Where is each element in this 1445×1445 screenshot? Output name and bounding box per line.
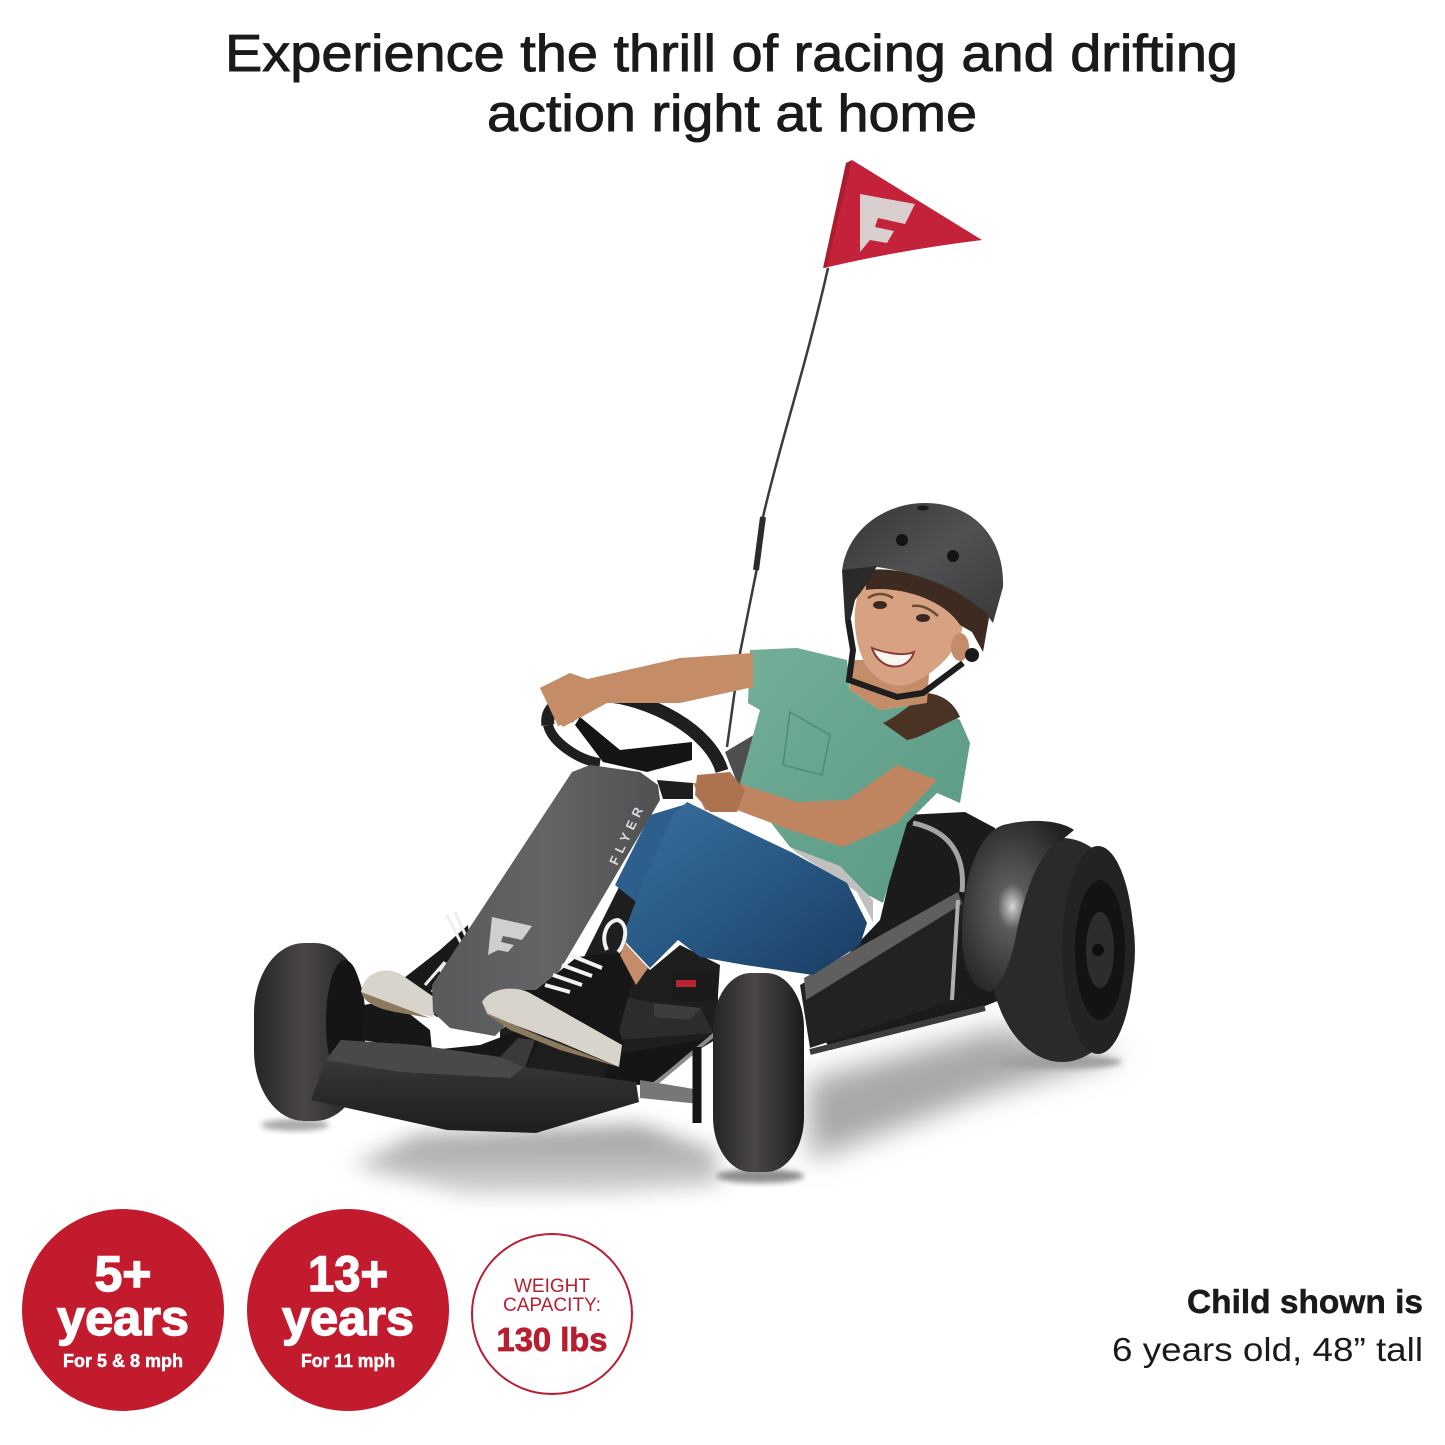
back sneaker <box>361 912 470 1018</box>
helmet <box>842 503 1003 697</box>
ponytail <box>883 693 960 740</box>
badge: 5+ years <box>22 1209 224 1411</box>
rear wheel and fender <box>962 821 1135 1062</box>
left front wheel <box>254 943 365 1121</box>
left arm <box>540 653 753 727</box>
hands <box>540 673 590 726</box>
badge: weight capacity <box>472 1234 632 1394</box>
note: child shown <box>1112 1283 1423 1368</box>
ground shadow <box>261 1028 1125 1196</box>
face <box>855 569 990 686</box>
badge: weight capacity: 130 lbs <box>496 1321 608 1358</box>
note: child shown: 6 years old, 48” tall <box>1112 1331 1423 1368</box>
neck <box>850 660 930 710</box>
title: action right at home <box>487 85 977 143</box>
dark area behind legs <box>500 875 720 1085</box>
badge: 13+ years: 13+ <box>308 1246 388 1302</box>
badge: 5+ years: For 5 & 8 mph <box>63 1351 183 1371</box>
badge: weight capacity: CAPACITY: <box>503 1295 601 1316</box>
front sneaker <box>482 920 648 1067</box>
front jeans leg <box>622 802 867 975</box>
badge: 5+ years: years <box>57 1290 189 1346</box>
badge: 5+ years: 5+ <box>94 1246 152 1302</box>
icon: red pennant flag with pole <box>727 160 982 747</box>
steering column <box>432 765 660 1036</box>
badge: 13+ years: For 11 mph <box>301 1351 395 1371</box>
rear chassis body <box>800 812 1000 1052</box>
pedals <box>362 1000 540 1070</box>
right front wheel <box>713 973 804 1172</box>
floorboard <box>600 972 718 1123</box>
belt <box>790 847 873 922</box>
seat back <box>725 733 770 790</box>
title <box>225 25 1238 143</box>
go-kart <box>254 503 1135 1172</box>
title: Experience the thrill of racing and drifting <box>225 25 1238 83</box>
badge: 13+ years <box>247 1209 449 1411</box>
badge: weight capacity: WEIGHT <box>514 1276 590 1297</box>
steering column: FLYER <box>606 804 646 867</box>
child <box>540 503 1003 975</box>
front bumper <box>311 1038 639 1133</box>
back jeans leg <box>615 803 700 905</box>
note: child shown: Child shown is <box>1187 1283 1423 1320</box>
t-shirt <box>740 648 970 903</box>
badge: 13+ years: years <box>282 1290 414 1346</box>
steering wheel <box>548 695 722 799</box>
right arm <box>693 765 937 847</box>
